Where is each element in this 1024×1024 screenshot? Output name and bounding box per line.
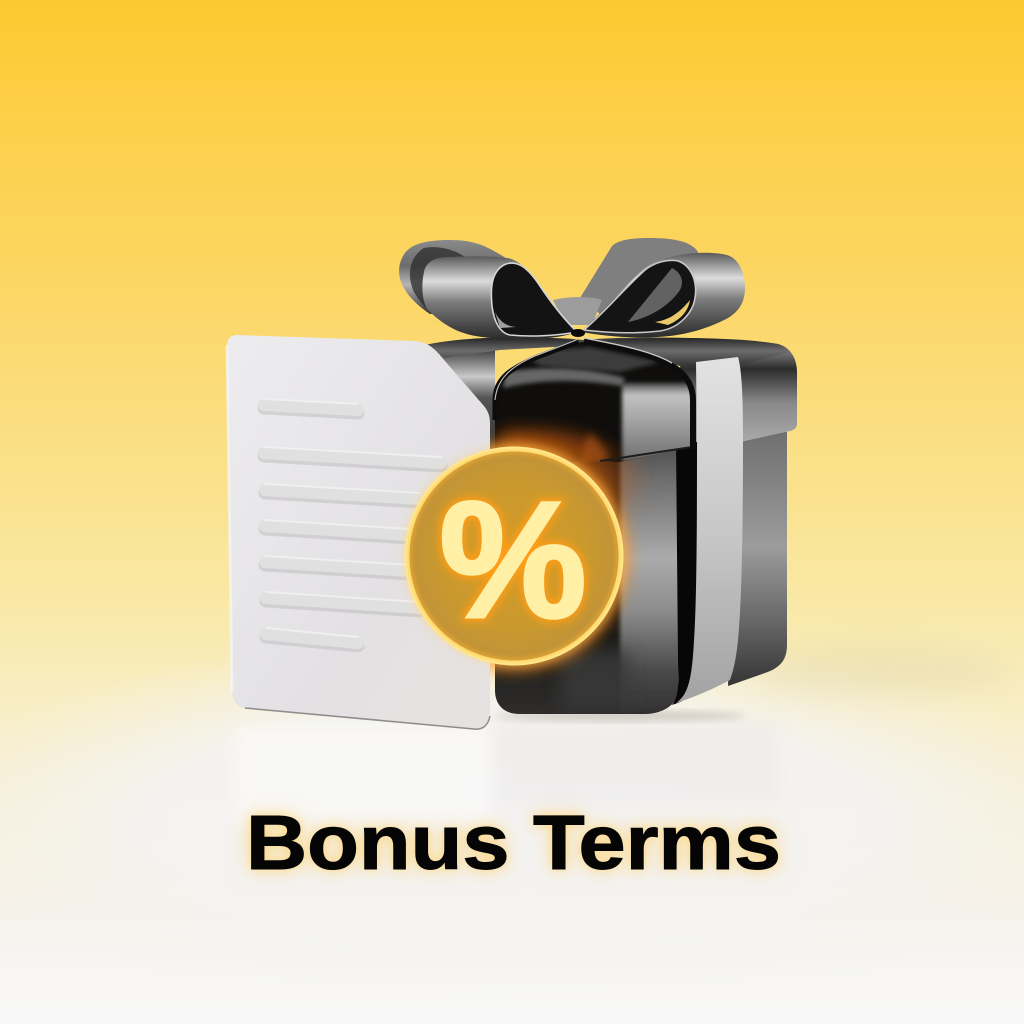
lid side and top [440,345,495,450]
ribbon strap edges over lid [495,341,578,420]
box right side panel [728,432,787,686]
left loop [422,256,577,339]
gift box back bow loops [399,238,698,330]
dark gap beside ribbon [672,440,700,705]
knot [571,329,585,337]
vertical ribbon [676,357,743,703]
lid shadow line [600,447,692,461]
gift box front bow [422,253,745,339]
title: Bonus Terms [246,800,781,886]
document [227,335,490,729]
percent badge: % [439,468,587,653]
illustration: gift box with document and percent badge [2,238,1022,909]
lid front [495,342,692,462]
box front face [495,440,678,714]
percent badge: % [439,468,587,653]
gift box body [425,337,797,714]
right loop [581,253,745,337]
document text lines [264,399,441,646]
floor glow and reflections [0,630,1024,1010]
percent badge [400,442,628,670]
